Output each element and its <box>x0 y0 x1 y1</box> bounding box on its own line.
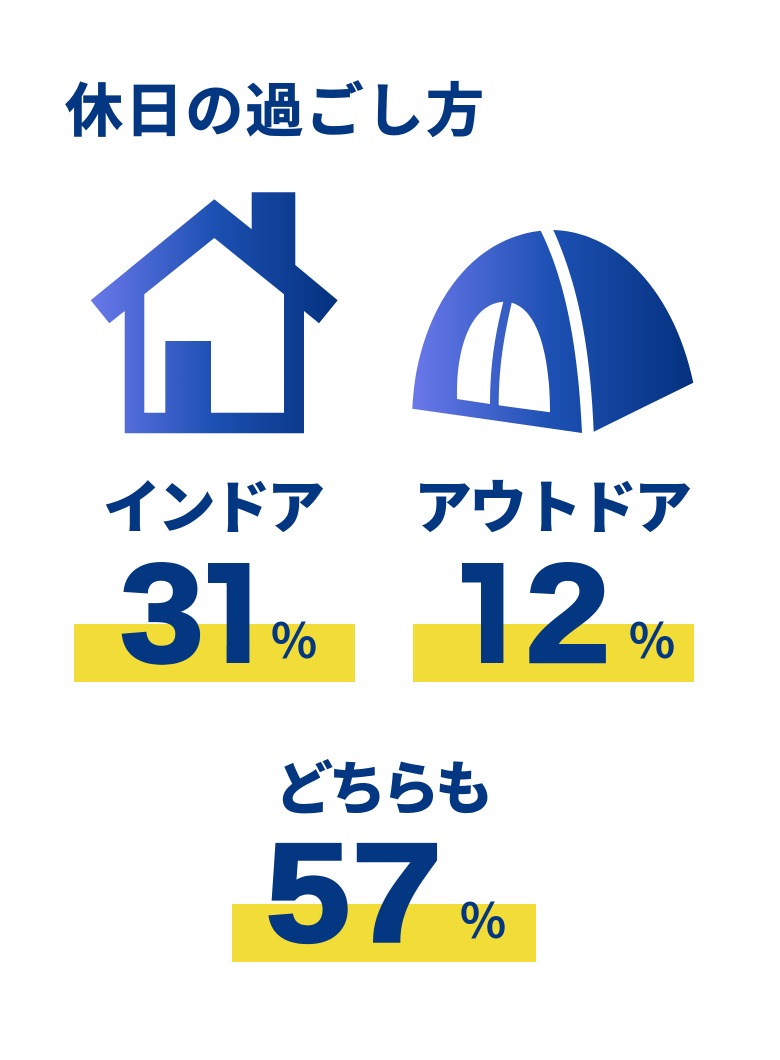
value: 12 percent <box>462 562 674 664</box>
tent right panel <box>553 230 693 432</box>
value: 31 percent: ％ <box>270 602 318 672</box>
value: 57 percent: 7 <box>352 815 442 971</box>
yellow bar: both <box>232 904 536 962</box>
icon: house <box>91 192 338 433</box>
value: 12 percent: ％ <box>628 602 676 672</box>
yellow bar: indoor <box>74 624 355 682</box>
value: 12 percent: 1 <box>451 534 529 692</box>
yellow bar: outdoor <box>413 624 694 682</box>
value: 31 percent: 1 <box>197 534 275 692</box>
tent left panel with window <box>412 231 582 433</box>
value: 57 percent <box>266 814 507 971</box>
value: 31 percent: 3 <box>120 535 204 691</box>
value: 57 percent: 5 <box>266 814 350 971</box>
value: 57 percent: ％ <box>459 882 507 952</box>
label: outdoor: アウトドア <box>414 476 692 541</box>
value: 12 percent: 2 <box>526 535 610 691</box>
icon: tent <box>412 230 693 433</box>
value: 31 percent <box>122 562 316 665</box>
label: both: どちらも <box>275 757 493 822</box>
label: indoor: インドア <box>103 476 325 541</box>
title: 休日の過ごし方 <box>65 79 484 144</box>
